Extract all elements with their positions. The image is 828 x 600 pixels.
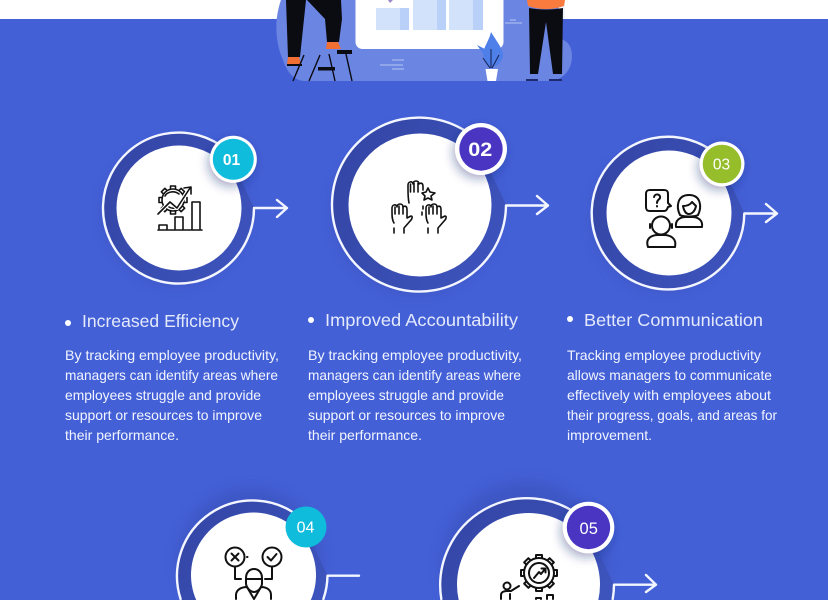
text: Increased Efficiency description: By tracking employee productivity, — [65, 348, 279, 363]
text: Better Communication description: improvement. — [567, 428, 652, 443]
badge 05: 05 — [580, 520, 598, 538]
text: Improved Accountability description: By tracking employee productivity, — [308, 348, 522, 363]
text: Better Communication description: Tracking employee productivity — [567, 348, 761, 363]
badge 02: 02 — [468, 140, 492, 161]
icon: presenter and gear — [501, 555, 557, 599]
text: Improved Accountability description: support or resources to improve — [308, 408, 505, 423]
text: Better Communication description: allows managers to communicate — [567, 368, 772, 383]
badge 02 — [455, 123, 507, 175]
heading: Better Communication: Better Communication — [584, 310, 763, 330]
text: Improved Accountability description: employees struggle and provide — [308, 388, 504, 403]
hand: right — [426, 204, 446, 233]
badge 04: 04 — [297, 520, 314, 537]
ring arrow 05 — [440, 498, 656, 599]
text: Increased Efficiency description — [65, 348, 279, 443]
text: Improved Accountability description: their performance. — [308, 428, 422, 443]
step 01: increased efficiency circle — [103, 133, 287, 285]
hand: left — [392, 204, 412, 233]
icon: manager decision — [226, 548, 282, 599]
text: Increased Efficiency description: their performance. — [65, 428, 179, 443]
step 05: circle (cropped at page edge) — [440, 481, 656, 600]
text: Improved Accountability description: managers can identify areas where — [308, 368, 521, 383]
badge 03: 03 — [713, 156, 730, 173]
icon: gear and growth chart — [158, 186, 202, 230]
heading: Improved Accountability: Improved Accountability — [325, 310, 518, 330]
person on stool — [286, 0, 352, 81]
header illustration — [276, 0, 572, 81]
text: Better Communication description — [567, 348, 777, 443]
text: Increased Efficiency description: employees struggle and provide — [65, 388, 261, 403]
plant — [477, 32, 503, 81]
badge 01: 01 — [223, 152, 240, 169]
text: Increased Efficiency description: support or resources to improve — [65, 408, 262, 423]
text: Improved Accountability description — [308, 348, 522, 443]
text: Better Communication description: effectively with employees about — [567, 388, 771, 403]
badge 04 — [286, 506, 326, 548]
text: Better Communication description: their progress, goals, and areas for — [567, 408, 777, 423]
hand: centre — [408, 181, 423, 215]
badge 03 — [700, 142, 744, 186]
top white band — [0, 0, 828, 19]
badge 01 — [210, 136, 257, 183]
presentation board — [356, 0, 504, 49]
heading: Increased Efficiency: Increased Efficiency — [82, 311, 239, 331]
step 02: improved accountability circle — [332, 118, 548, 294]
ring arrow 04 — [177, 500, 359, 599]
step 03: better communication circle — [592, 137, 777, 290]
step 04: circle (cropped at page edge) — [177, 488, 359, 600]
standing person — [526, 0, 565, 81]
icon: two people conversing — [646, 190, 702, 247]
text: Increased Efficiency description: managers can identify areas where — [65, 368, 278, 383]
ring arrow 01 — [103, 133, 287, 284]
star — [422, 188, 435, 200]
ring arrow 02 — [332, 118, 548, 292]
badge 05 — [563, 502, 614, 553]
ring arrow 03 — [592, 137, 777, 289]
icon: raised hands — [392, 181, 446, 233]
